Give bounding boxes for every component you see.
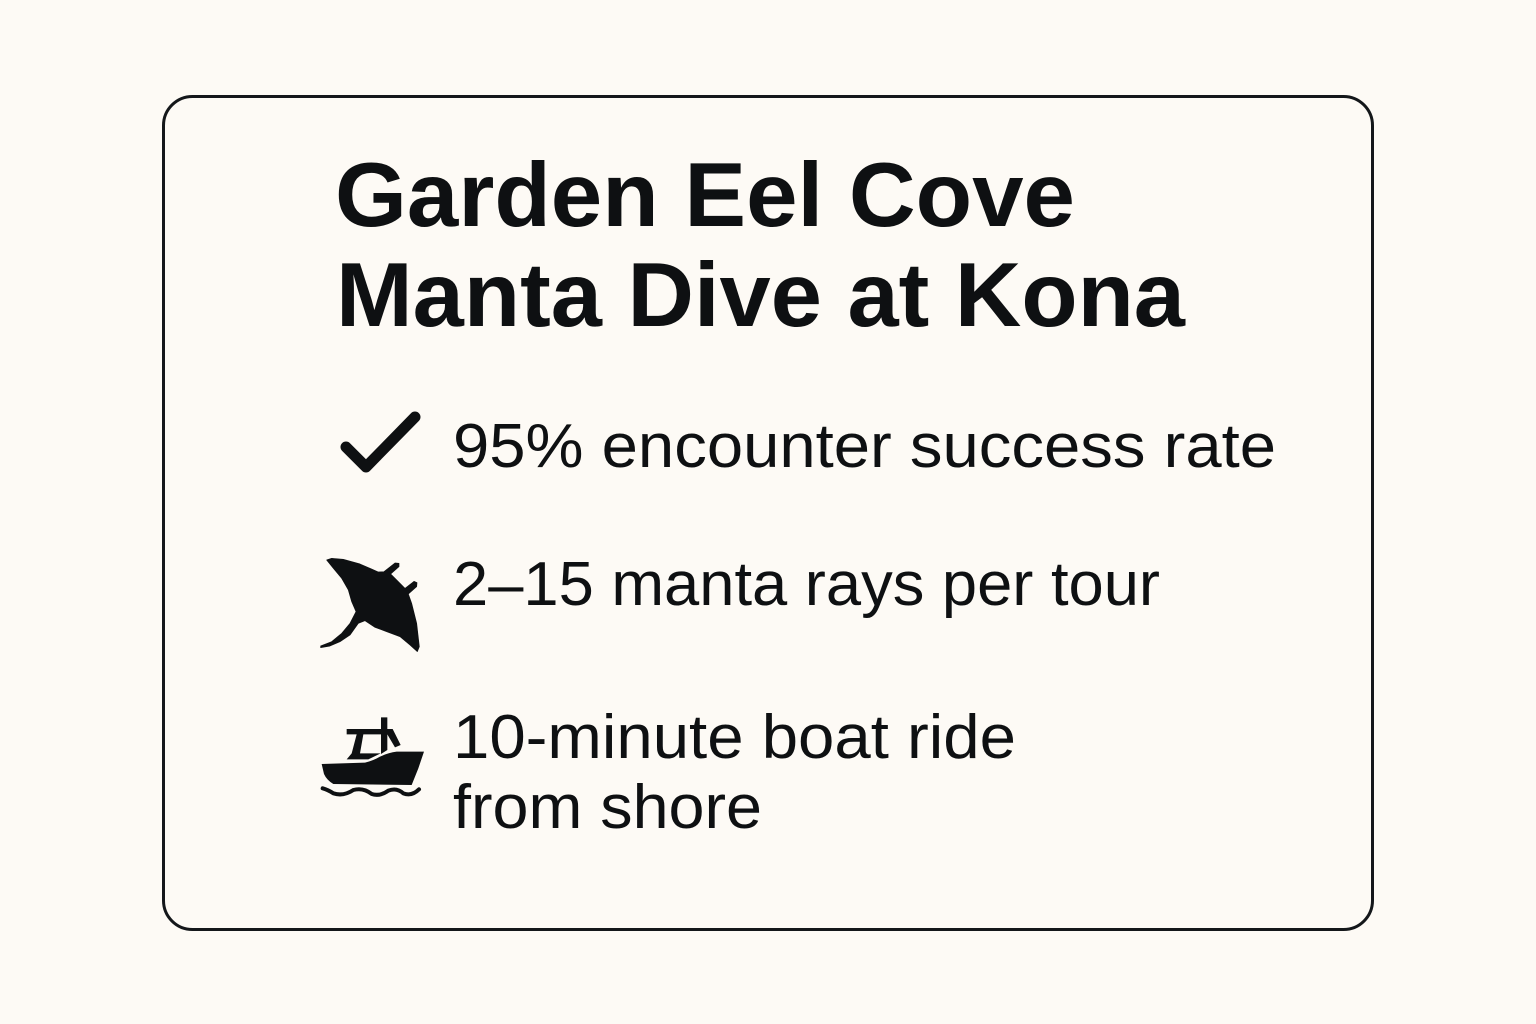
boat cabin [347, 717, 401, 759]
text: boat ride [453, 703, 1016, 842]
text: encounter success rate: 95% encounter success rate [453, 412, 1276, 481]
title [335, 145, 1186, 346]
icon: check mark [346, 417, 415, 467]
boat hull [322, 752, 424, 785]
icon: manta ray [321, 558, 419, 652]
title: Manta Dive at Kona [336, 245, 1186, 346]
title: Garden Eel Cove [335, 145, 1075, 246]
water waves [323, 788, 419, 795]
text: boat ride: from shore [453, 773, 762, 842]
text: manta rays per tour: 2–15 manta rays per tour [453, 550, 1160, 619]
icon: boat [322, 717, 424, 795]
text: boat ride: 10-minute boat ride [453, 703, 1016, 772]
panel: rounded card [164, 96, 1372, 930]
